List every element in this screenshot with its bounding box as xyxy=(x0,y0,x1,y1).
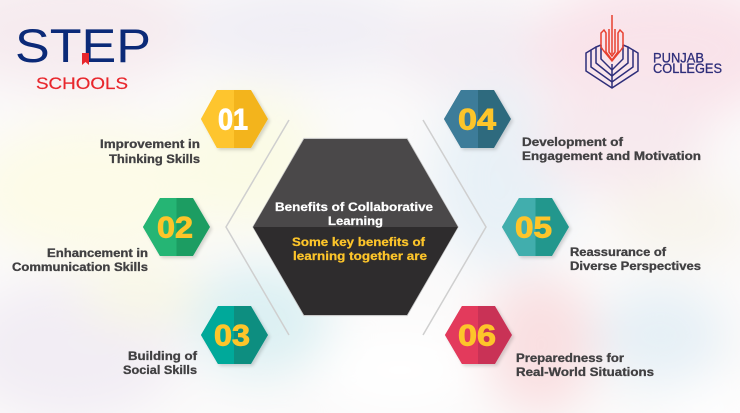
hexagon 06 xyxy=(445,306,512,364)
center subheading: Some key benefits of xyxy=(292,235,426,249)
left chevron line xyxy=(226,120,289,335)
hexagon 03: 03 xyxy=(214,320,250,352)
logo: Punjab Colleges: COLLEGES xyxy=(653,61,722,76)
hexagon 04: 04 xyxy=(458,104,496,136)
icon: college emblem xyxy=(586,15,638,88)
logo: STEP Schools: STEP xyxy=(15,19,151,72)
label 06: Preparedness for xyxy=(516,351,624,365)
logo: STEP Schools: SCHOOLS xyxy=(36,75,128,93)
hexagon 02: 02 xyxy=(157,212,193,244)
center subheading: learning together are xyxy=(293,249,427,263)
center heading: Benefits of Collaborative xyxy=(275,200,433,214)
hexagon 05: 05 xyxy=(515,212,552,244)
label 05: Diverse Perspectives xyxy=(570,259,701,273)
right chevron line xyxy=(423,120,486,335)
label 01: Improvement in xyxy=(100,137,200,151)
label 05: Reassurance of xyxy=(570,245,666,259)
hexagon 06: 06 xyxy=(458,320,496,352)
hexagon 01 xyxy=(201,90,268,148)
center subheading xyxy=(292,235,427,263)
central hexagon xyxy=(253,138,458,316)
center heading: Learning xyxy=(328,214,383,228)
label 03 xyxy=(123,349,197,377)
label 01 xyxy=(100,137,200,166)
hexagon 01: 01 xyxy=(218,104,248,136)
label 06: Real-World Situations xyxy=(516,365,654,379)
logo: STEP Schools xyxy=(15,19,151,93)
label 03: Social Skills xyxy=(123,363,197,377)
label 02: Enhancement in xyxy=(47,246,148,260)
logo: Punjab Colleges xyxy=(586,15,722,88)
label 05 xyxy=(570,245,701,273)
hexagon 04 xyxy=(444,90,511,148)
label 04: Development of xyxy=(522,135,623,149)
hexagon 05 xyxy=(502,198,569,256)
label 03: Building of xyxy=(128,349,197,363)
label 04: Engagement and Motivation xyxy=(522,149,701,163)
icon: red bookmark xyxy=(82,53,89,65)
label 01: Thinking Skills xyxy=(109,152,200,166)
label 02 xyxy=(12,246,148,274)
center heading xyxy=(275,200,433,228)
label 04 xyxy=(522,135,701,163)
hexagon 02 xyxy=(143,198,210,256)
logo: Punjab Colleges: PUNJAB xyxy=(653,50,704,66)
label 06 xyxy=(516,351,654,379)
label 02: Communication Skills xyxy=(12,260,148,274)
hexagon 03 xyxy=(201,306,268,364)
